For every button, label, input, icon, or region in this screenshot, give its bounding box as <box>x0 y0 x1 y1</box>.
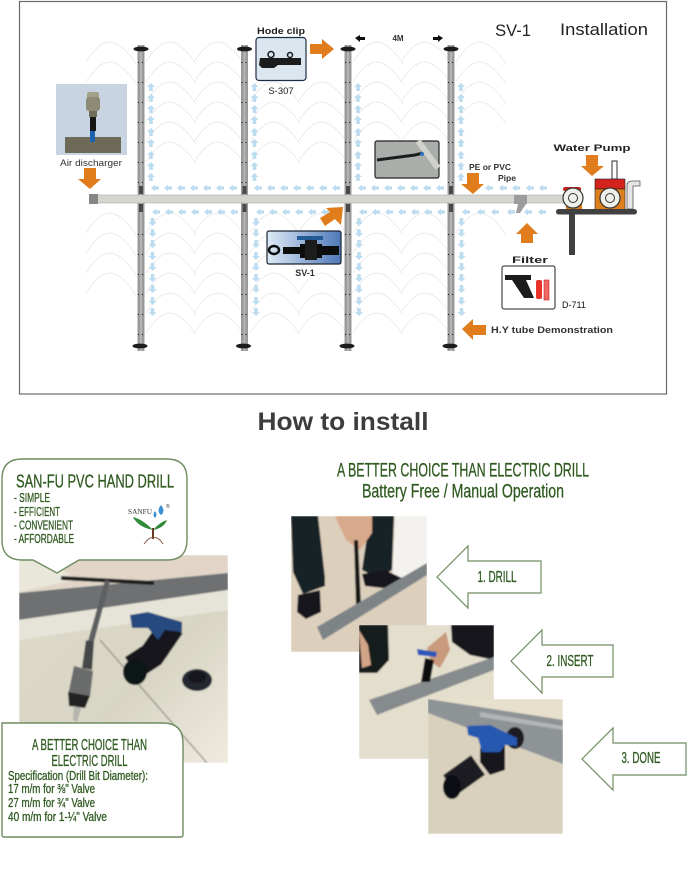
arrow: water pump <box>581 155 604 176</box>
label: H.Y tube demonstration: H.Y tube Demonstration <box>491 325 613 335</box>
air discharger end cap <box>89 194 98 204</box>
4M spacing label: 4M <box>392 34 404 43</box>
callout heading: A BETTER CHOICE THAN <box>32 737 147 754</box>
arrow: pipe <box>461 173 484 194</box>
photo: step 2 insert <box>359 625 494 759</box>
arrow: step 1 drill <box>437 546 541 608</box>
callout: better choice specification <box>2 723 183 837</box>
label: SV-1: SV-1 <box>295 268 315 278</box>
callout title: SAN-FU PVC HAND DRILL <box>16 470 174 492</box>
arrow: step 2 insert: 2. INSERT <box>546 653 594 670</box>
arrow: step 3 done <box>582 728 686 790</box>
photo: hand drill and valve <box>19 555 228 763</box>
arrow: hose clip <box>310 39 334 59</box>
filter D-711 image <box>502 266 555 309</box>
specification list: 17 m/m for ⅜" Valve <box>8 782 95 796</box>
title: Installation: Installation <box>560 21 648 39</box>
label: hose clip: Hode clip <box>257 26 306 36</box>
specification list: 27 m/m for ¾" Valve <box>8 796 95 810</box>
SV-1 valve image <box>267 231 341 264</box>
label: filter: Filter <box>512 255 549 265</box>
specification list <box>8 769 148 824</box>
main supply pipe <box>96 195 566 203</box>
photo: step 3 done <box>428 699 563 834</box>
specification list: 40 m/m for 1-¼" Valve <box>8 810 107 824</box>
arrow: H.Y tube <box>462 319 486 340</box>
arrow: SV-1 valve <box>320 207 343 226</box>
label: S-307: S-307 <box>268 86 294 97</box>
feature list: - EFFICIENT <box>14 504 60 519</box>
sprinkler spray arcs <box>86 42 506 335</box>
feature list: - CONVENIENT <box>14 518 73 532</box>
logo: SanFu: ® <box>166 503 170 510</box>
heading: how to install: How to install <box>258 408 428 436</box>
label: air discharger: Air discharger <box>60 158 122 169</box>
arrow: air discharger <box>78 168 101 189</box>
arrow: step 2 insert <box>511 630 613 693</box>
connection photo <box>375 141 439 178</box>
air discharger photo <box>56 84 127 155</box>
title: SV-1: SV-1 <box>495 22 531 40</box>
photo: step 1 drill <box>291 516 427 652</box>
label: water pump: Water Pump <box>554 143 631 153</box>
drip tubes <box>132 45 458 351</box>
label: PE or PVC pipe: Pipe <box>498 173 516 183</box>
feature list: - SIMPLE <box>14 490 50 505</box>
label: PE or PVC pipe: PE or PVC <box>469 162 511 172</box>
label: D-711: D-711 <box>562 300 586 310</box>
water pump <box>514 161 640 255</box>
logo: SanFu: SANFU <box>128 508 152 516</box>
panel: installation diagram <box>20 2 666 394</box>
callout: San-Fu PVC hand drill <box>2 459 187 573</box>
arrow: step 1 drill: 1. DRILL <box>478 569 517 586</box>
subheading: battery free: Battery Free / Manual Operation <box>362 482 564 502</box>
feature list: - AFFORDABLE <box>14 531 74 546</box>
4M spacing label <box>355 34 443 43</box>
specification list: Specification (Drill Bit Diameter): <box>8 769 148 783</box>
feature list <box>14 490 74 546</box>
water flow arrows <box>147 83 547 316</box>
arrow: step 3 done: 3. DONE <box>622 750 660 767</box>
logo: SanFu <box>128 503 170 544</box>
callout heading: ELECTRIC DRILL <box>52 753 128 770</box>
hose clip S-307 image <box>256 38 306 80</box>
arrow: filter <box>516 223 538 243</box>
